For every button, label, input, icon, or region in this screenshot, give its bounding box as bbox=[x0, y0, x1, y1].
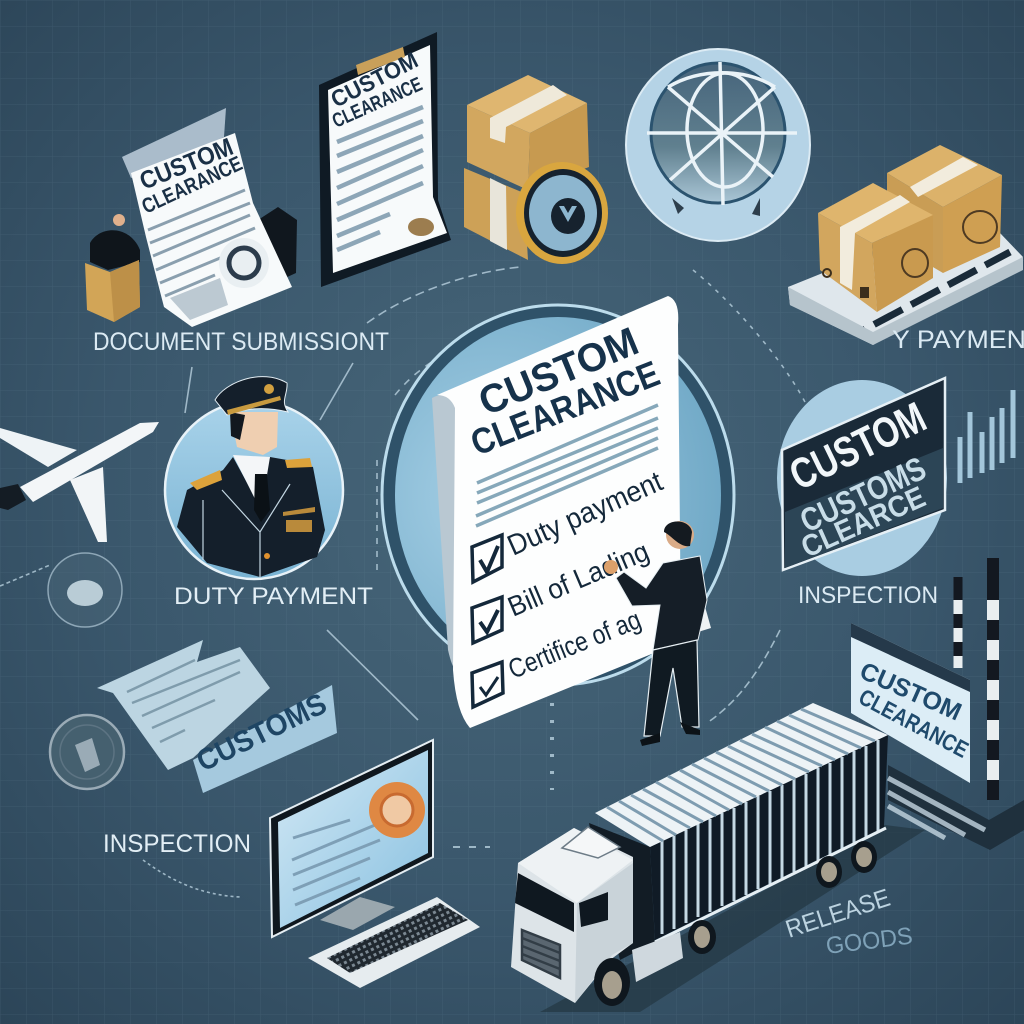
panel: customs sign board: CUSTOM bbox=[782, 393, 934, 500]
panel: customs papers bbox=[97, 640, 337, 793]
checklist item: duty payment bbox=[472, 466, 667, 582]
label: document submission: DOCUMENT SUBMISSIONT bbox=[93, 328, 389, 356]
truck cab bbox=[511, 827, 633, 1006]
panel: stacked boxes with seal bbox=[464, 75, 608, 264]
figure: man writing on document bbox=[604, 521, 711, 746]
skyline bars bbox=[960, 390, 1013, 483]
rear box bbox=[887, 145, 1002, 273]
panel: central document: CLEARANCE bbox=[465, 352, 665, 463]
panel: pallet of boxes bbox=[788, 145, 1023, 345]
panel: gate sign and barrier: CUSTOM bbox=[856, 657, 966, 726]
barrier poles bbox=[987, 558, 999, 800]
label: inspection right: INSPECTION bbox=[798, 582, 938, 609]
panel: clipboard document: CLEARANCE bbox=[329, 73, 426, 133]
label: payment: Y PAYMEN bbox=[892, 326, 1024, 354]
icon: small seal bbox=[48, 553, 122, 627]
panel: customs sign board: CLEARCE bbox=[796, 481, 930, 564]
central circle bbox=[382, 305, 734, 685]
container side bbox=[650, 735, 888, 940]
document sheet: CUSTOM bbox=[136, 133, 237, 196]
panel: computer monitor bbox=[270, 740, 480, 988]
panel: truck and container bbox=[511, 703, 925, 1012]
front box bbox=[818, 183, 933, 312]
side window bbox=[579, 892, 608, 927]
panel: central document bbox=[432, 296, 681, 728]
checklist item: bill of lading: Bill of Lading bbox=[503, 535, 653, 623]
central document title: CUSTOM bbox=[473, 319, 645, 424]
officer head and cap bbox=[230, 412, 278, 455]
process connector arcs bbox=[0, 267, 805, 897]
bags behind document bbox=[85, 207, 297, 322]
checklist item: duty payment: Duty payment bbox=[503, 466, 667, 562]
panel: customs officer bbox=[165, 377, 343, 579]
document sheet: CLEARANCE bbox=[138, 152, 246, 219]
monitor stand bbox=[320, 897, 395, 930]
panel: gate sign and barrier: CLEARANCE bbox=[855, 683, 973, 763]
panel: gate sign and barrier bbox=[851, 558, 1024, 850]
keyboard bbox=[308, 897, 480, 988]
label: inspection left: INSPECTION bbox=[103, 830, 251, 858]
label: release goods: GOODS bbox=[824, 923, 914, 960]
icon: globe bbox=[626, 49, 810, 241]
panel: customs papers: CUSTOMS bbox=[192, 687, 332, 778]
circle behind sign bbox=[777, 380, 947, 576]
windshield bbox=[515, 873, 574, 932]
rear wheels bbox=[688, 841, 877, 954]
icon: lower seal bbox=[50, 715, 124, 789]
panel: clipboard document: CUSTOM bbox=[326, 47, 422, 112]
monitor screen bbox=[278, 750, 428, 928]
seal badge bbox=[516, 162, 608, 264]
container end wall bbox=[589, 823, 655, 960]
panel: customs sign board: CUSTOMS bbox=[794, 449, 931, 539]
monitor frame bbox=[270, 740, 433, 937]
panel: clipboard document bbox=[319, 32, 451, 287]
checklist item: certificate: Certifice of ag bbox=[504, 604, 645, 685]
chassis tank bbox=[632, 932, 683, 982]
sign panel bbox=[782, 378, 945, 570]
pallet bbox=[788, 233, 1023, 345]
officer jacket bbox=[177, 457, 325, 577]
label: duty payment: DUTY PAYMENT bbox=[174, 583, 373, 610]
panel: customs sign board bbox=[777, 378, 1013, 576]
icon: airplane bbox=[0, 422, 159, 542]
grille bbox=[522, 930, 560, 978]
container roof bbox=[595, 703, 888, 847]
panel: document submission bbox=[85, 108, 389, 356]
checklist item: bill of lading bbox=[472, 535, 653, 643]
label: release goods bbox=[782, 884, 914, 960]
checklist item: certificate bbox=[472, 604, 645, 707]
stamp bbox=[369, 782, 425, 838]
gate platform bbox=[888, 765, 1024, 850]
sign bbox=[851, 623, 970, 783]
document sheet bbox=[122, 108, 292, 327]
central document body lines bbox=[476, 405, 658, 526]
label: release goods: RELEASE bbox=[782, 884, 894, 944]
